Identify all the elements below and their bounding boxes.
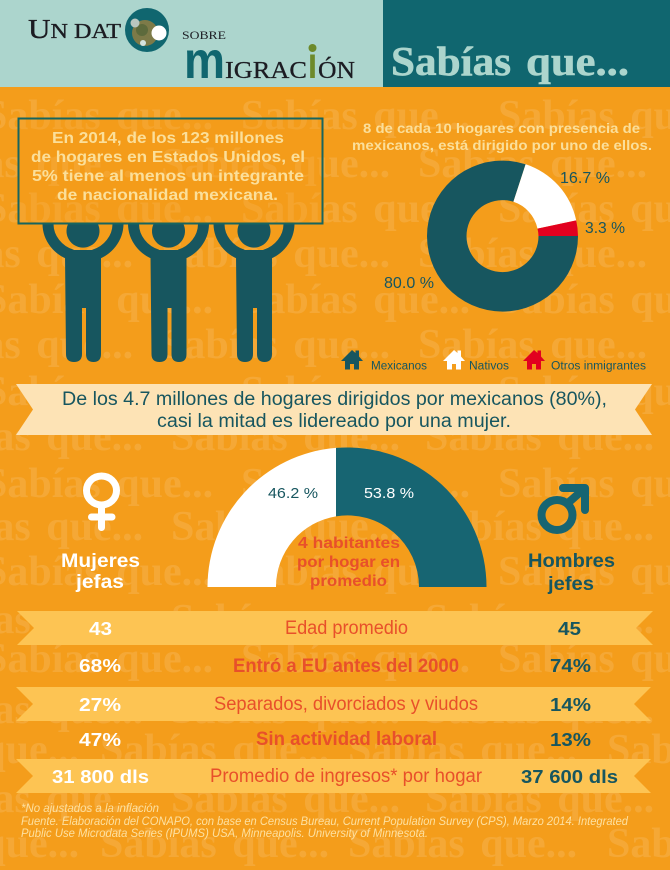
table row: Promedio de ingresos por hogar: 37 600 dls bbox=[521, 766, 618, 787]
label: 53.8 %: 53.8 % bbox=[364, 485, 414, 502]
text: Sabías que... bbox=[171, 776, 400, 822]
heading: Mujeres jefas: Mujeres bbox=[61, 550, 140, 572]
header: Sabías que panel: Sabías bbox=[391, 38, 511, 84]
table row: Entró a EU antes del 2000 bbox=[79, 655, 591, 677]
icon: house Mexicanos bbox=[341, 350, 363, 370]
table row: Separados, divorciados y viudos bbox=[16, 687, 651, 721]
text: Sabías que... bbox=[161, 322, 390, 368]
label: 3.3 %: 3.3 % bbox=[585, 220, 625, 237]
text: Sabías que... bbox=[171, 504, 400, 550]
sign: text box about households: En 2014, de los 123 millones bbox=[52, 130, 284, 147]
logo text: Migración: IGRAC bbox=[225, 58, 307, 84]
icon: house Otros inmigrantes bbox=[523, 350, 545, 370]
text: habitants per household: promedio bbox=[310, 573, 387, 590]
sign: text box about households bbox=[18, 118, 322, 224]
text: Sabías que... bbox=[425, 414, 654, 460]
icon: person 1 bbox=[48, 224, 118, 362]
text: Sabías que... bbox=[425, 597, 654, 643]
text: Sabías que... bbox=[161, 141, 390, 187]
heading: Hombres jefes: Hombres bbox=[528, 550, 615, 572]
footnote and source bbox=[21, 803, 629, 840]
table row: Sin actividad laboral: 13% bbox=[550, 729, 591, 750]
text: Sabías que... bbox=[171, 687, 400, 733]
footnote and source: Public Use Microdata Series (IPUMS) USA, Minneapolis. University of Minnesota. bbox=[21, 828, 428, 840]
segment: Nativos 16.7% bbox=[513, 164, 576, 229]
banner: women-led households: casi la mitad es lidereado por una mujer. bbox=[157, 411, 511, 432]
text: habitants per household: por hogar en bbox=[297, 554, 400, 571]
text: habitants per household: 4 habitantes bbox=[298, 535, 400, 552]
table row: Edad promedio: Edad promedio bbox=[285, 618, 408, 639]
logo text: Migración bbox=[184, 32, 355, 90]
table row: Separados, divorciados y viudos: 27% bbox=[79, 694, 121, 715]
table row: Sin actividad laboral: Sin actividad laboral bbox=[256, 729, 437, 750]
heading: Hombres jefes bbox=[528, 550, 615, 595]
text: Sabías que... bbox=[348, 821, 577, 867]
table row: Sin actividad laboral: 47% bbox=[79, 729, 121, 750]
logo text: sobre: SOBRE bbox=[182, 28, 226, 42]
table row: Sin actividad laboral bbox=[79, 729, 591, 750]
logo text: Migración: m bbox=[184, 32, 225, 90]
table row: Edad promedio bbox=[17, 611, 653, 645]
table row: Edad promedio: 43 bbox=[89, 618, 112, 639]
table row: Entró a EU antes del 2000: Entró a EU antes del 2000 bbox=[233, 656, 459, 677]
icon: globe bbox=[125, 8, 169, 52]
text: Sabías que... bbox=[241, 461, 470, 507]
header: logo panel bbox=[0, 0, 383, 90]
banner: women-led households bbox=[16, 384, 652, 435]
text: Sabías que... bbox=[241, 277, 470, 323]
legend label: Mexicanos: Mexicanos bbox=[371, 360, 427, 372]
table row: Edad promedio: 45 bbox=[558, 618, 581, 639]
table row: Separados, divorciados y viudos: 14% bbox=[550, 694, 591, 715]
footnote and source: *No ajustados a la inflación bbox=[21, 803, 159, 815]
donut chart: household heads bbox=[384, 161, 625, 312]
label: 46.2 %: 46.2 % bbox=[268, 485, 318, 502]
heading: Mujeres jefas bbox=[61, 550, 140, 593]
logo text: Migración: I bbox=[308, 48, 317, 86]
sign: text box about households: de nacionalidad mexicana. bbox=[57, 187, 278, 204]
text: Sabías que... bbox=[418, 231, 647, 277]
banner: women-led households: De los 4.7 millones de hogares dirigidos por mexicanos (80%), bbox=[62, 389, 607, 410]
text: Sabías que... bbox=[171, 597, 400, 643]
text: Sabías que... bbox=[425, 504, 654, 550]
text: Sabías que... bbox=[171, 414, 400, 460]
header: Sabías que panel bbox=[383, 0, 670, 87]
label: 80.0 %: 80.0 % bbox=[384, 275, 434, 292]
sign: text box about households: 5% tiene al menos un integrante bbox=[32, 168, 304, 185]
icon: male symbol bbox=[542, 488, 585, 530]
text: habitants per household bbox=[297, 535, 400, 590]
table row: Promedio de ingresos por hogar bbox=[16, 759, 651, 793]
table row: Entró a EU antes del 2000: 68% bbox=[79, 655, 121, 676]
heading: Hombres jefes: jefes bbox=[547, 573, 594, 595]
legend label: Nativos: Nativos bbox=[469, 360, 509, 372]
table row: Promedio de ingresos por hogar: Promedio de ingresos* por hogar bbox=[210, 766, 483, 787]
footnote and source: Fuente. Elaboración del CONAPO, con base en Census Bureau, Current Population Survey (CPS), Marzo 2014. Integrated bbox=[21, 816, 629, 828]
icon: person 2 bbox=[134, 224, 204, 362]
table row: Entró a EU antes del 2000: 74% bbox=[550, 655, 591, 676]
legend bbox=[341, 350, 646, 372]
icon: person 3 bbox=[219, 224, 289, 362]
table row: Promedio de ingresos por hogar: 31 800 dls bbox=[52, 766, 149, 787]
legend label: Otros inmigrantes: Otros inmigrantes bbox=[551, 360, 646, 372]
text: Sabías que... bbox=[100, 727, 329, 773]
text: Sabías que... bbox=[418, 141, 647, 187]
header: Sabías que panel: que... bbox=[526, 38, 629, 84]
text: Sabías que... bbox=[100, 821, 329, 867]
segment: men 53.8% bbox=[336, 447, 486, 587]
text: Sabías que... bbox=[241, 93, 470, 139]
segment: Otros inmigrantes 3.3% bbox=[538, 220, 578, 236]
text: Sabías que... bbox=[425, 776, 654, 822]
text: Sabías que... bbox=[241, 636, 470, 682]
text: Sabías que... bbox=[348, 727, 577, 773]
label: 16.7 %: 16.7 % bbox=[560, 170, 610, 187]
half donut chart: household heads by sex bbox=[208, 447, 486, 590]
heading: donut chart: 8 de cada 10 hogares con presencia de bbox=[363, 121, 641, 136]
text: Sabías que... bbox=[241, 186, 470, 232]
text: Sabías que... bbox=[425, 687, 654, 733]
icon: house Nativos bbox=[443, 350, 465, 370]
icon: three people holding the sign bbox=[48, 224, 289, 362]
logo text: Un dato: UN DAT bbox=[28, 14, 121, 44]
icon: female symbol bbox=[86, 476, 116, 528]
heading: donut chart bbox=[352, 121, 652, 153]
logo text: Migración: ÓN bbox=[318, 57, 355, 84]
text: Sabías que... bbox=[241, 549, 470, 595]
heading: Mujeres jefas: jefas bbox=[75, 571, 124, 593]
table row: Separados, divorciados y viudos: Separados, divorciados y viudos bbox=[214, 694, 478, 715]
text: Sabías que... bbox=[418, 322, 647, 368]
sign: text box about households: de hogares en Estados Unidos, el bbox=[31, 149, 305, 166]
segment: women 46.2% bbox=[208, 448, 336, 587]
segment: Mexicanos 80.0% bbox=[427, 161, 578, 312]
text: Sabías que... bbox=[241, 369, 470, 415]
text: Sabías que... bbox=[161, 231, 390, 277]
heading: donut chart: mexicanos, está dirigido por uno de ellos. bbox=[352, 138, 652, 153]
